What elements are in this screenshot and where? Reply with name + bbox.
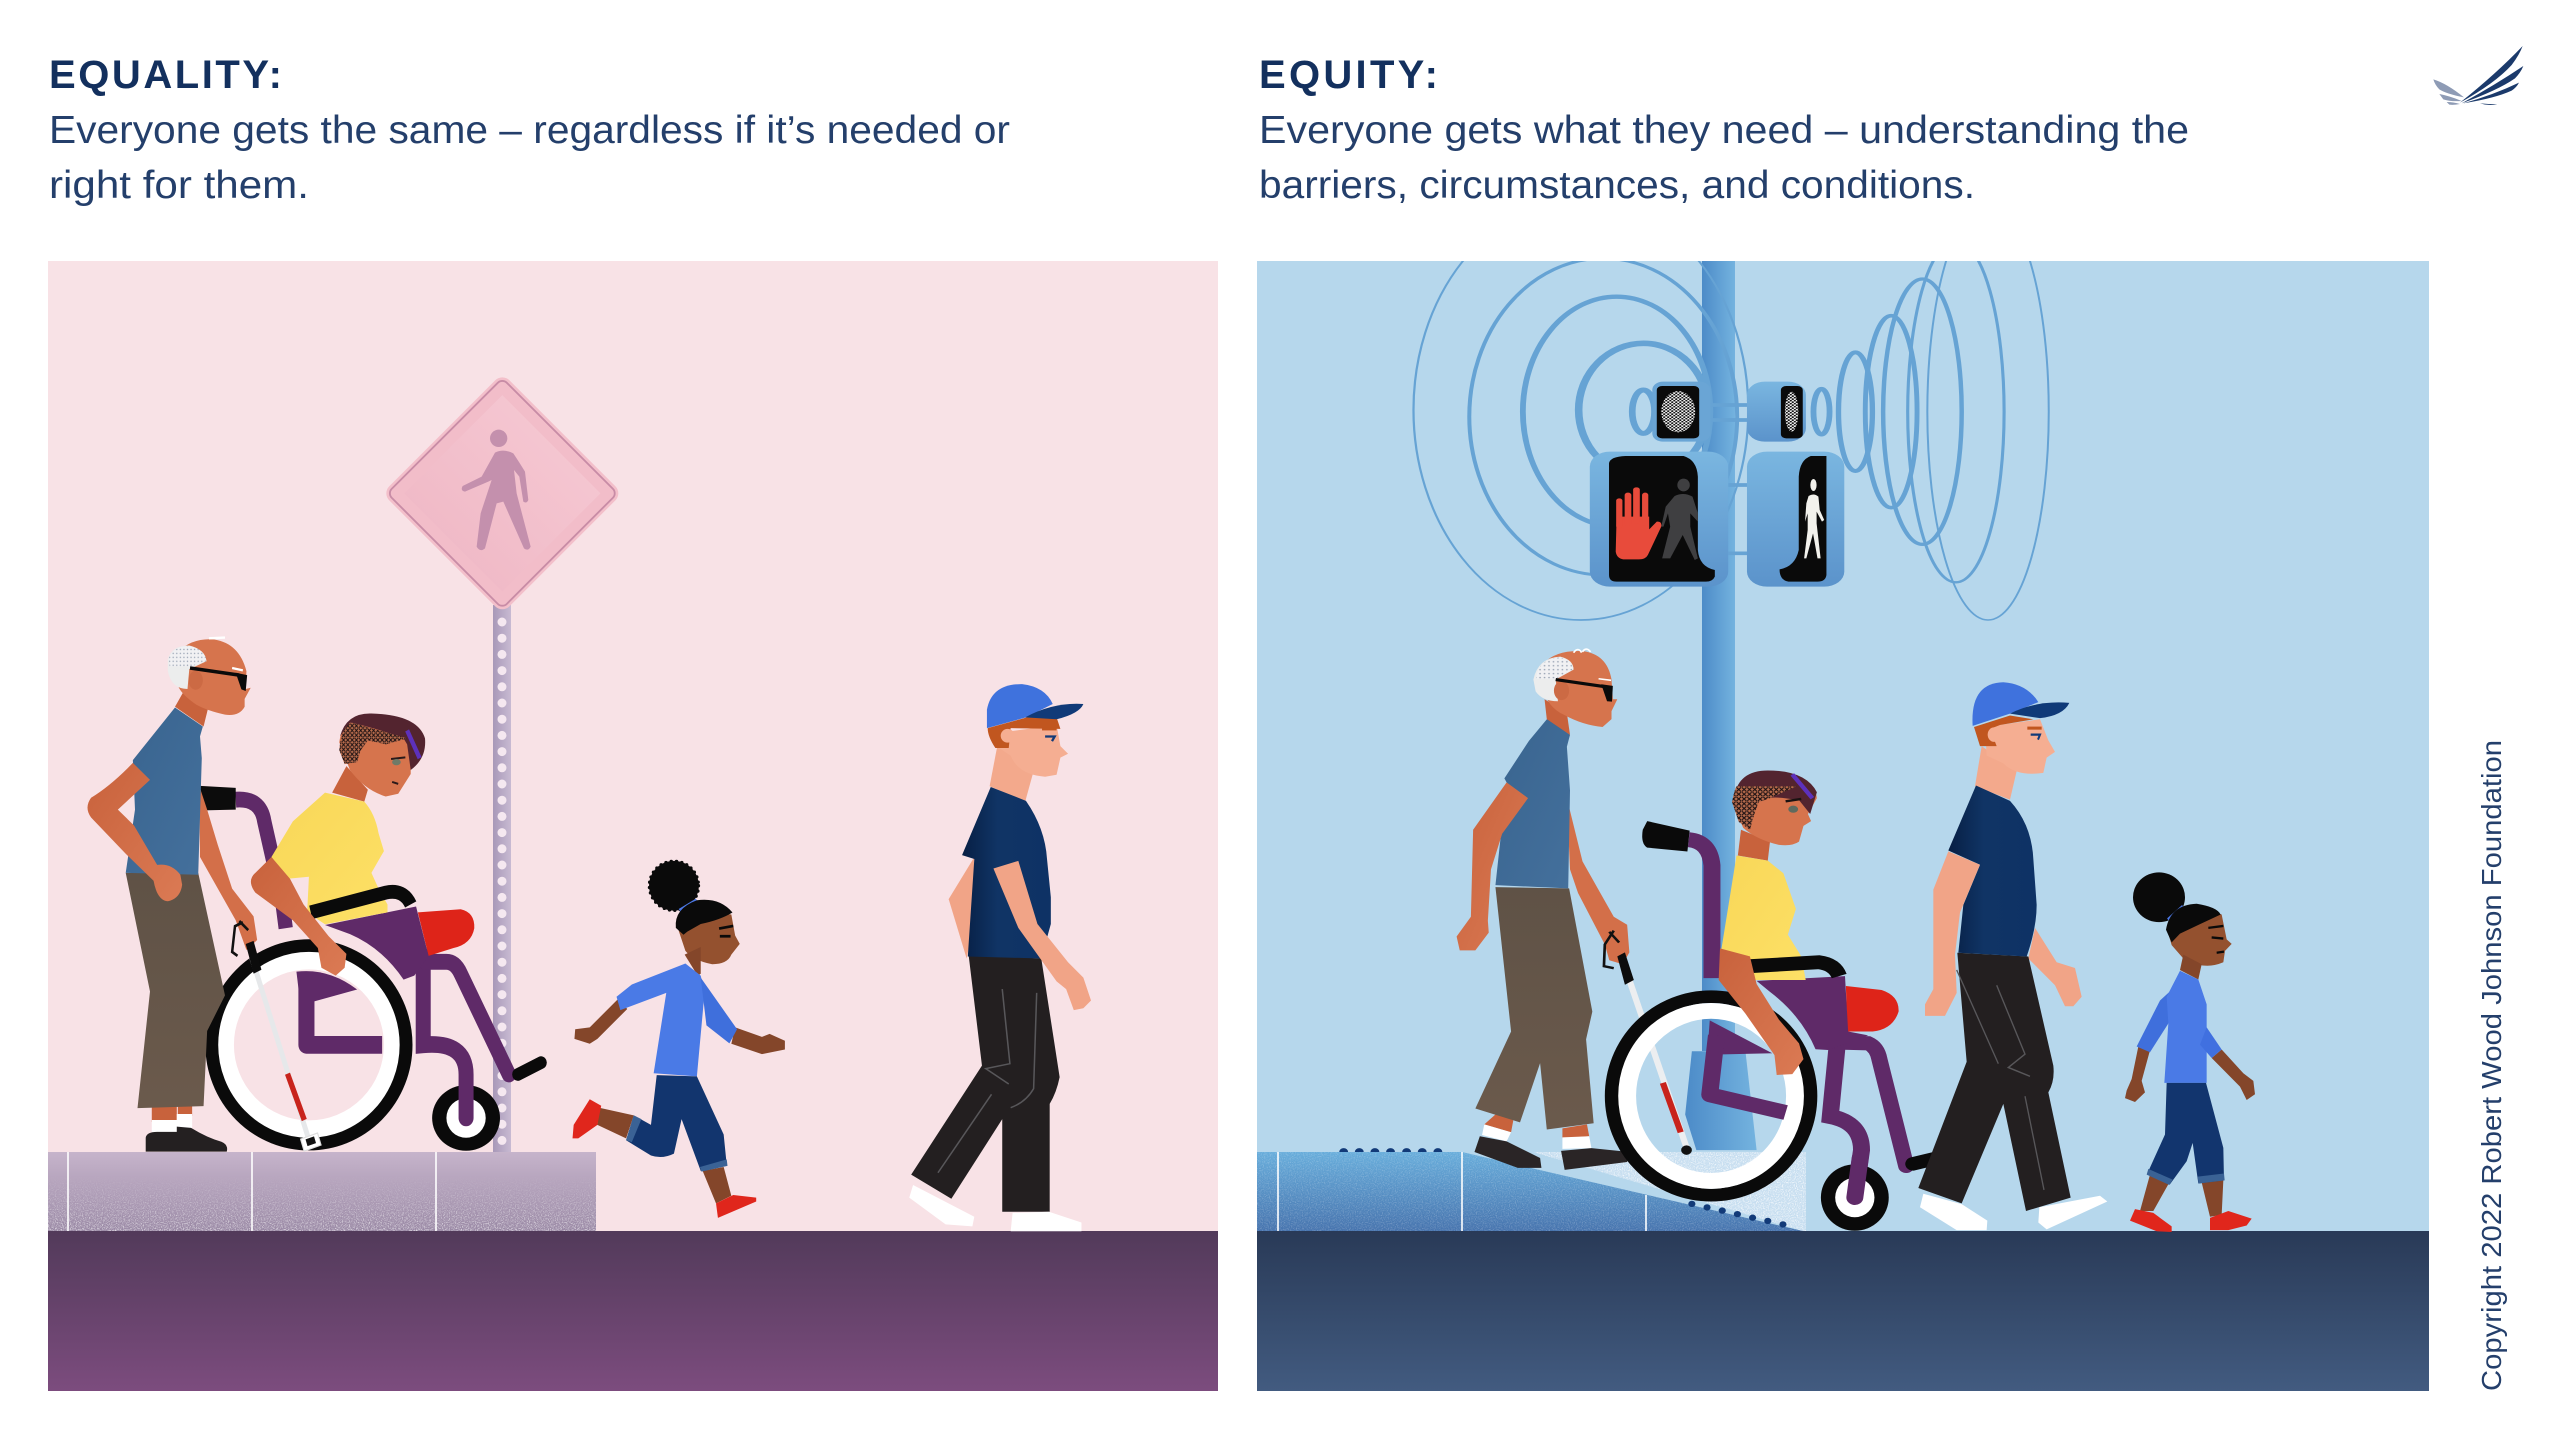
man: rear arm and fist: [87, 763, 182, 901]
description: equality: right for them.: [49, 164, 309, 207]
wheelchair user: [1719, 770, 1899, 1075]
panel: equity scene: [1257, 200, 2429, 1391]
signal connectors: [1713, 403, 1747, 556]
description: equality: [49, 109, 1010, 207]
description: equity: Everyone gets what they need – understanding the: [1259, 109, 2189, 152]
group: older man and wheelchair user: [87, 638, 541, 1152]
sign post: [493, 605, 511, 1155]
group: equity man, wheelchair user and tactile dots: [1339, 649, 1937, 1231]
icon: pedestrian silhouette: [462, 430, 531, 550]
man: shirt: [126, 708, 203, 875]
wheelchair user: head and hair: [339, 713, 425, 797]
footrest: [1913, 1158, 1937, 1164]
description: equality: Everyone gets the same – regardless if it’s needed or: [49, 109, 1010, 152]
group: child running and man walking: [573, 684, 1091, 1231]
title: equality: EQUALITY:: [49, 53, 282, 97]
wheelchair big wheel: [212, 947, 406, 1143]
wheelchair user: legs: [325, 906, 474, 980]
child running: [573, 861, 785, 1218]
sound waves: left: [1412, 261, 1748, 621]
armrest: [311, 892, 411, 912]
cane: [1604, 931, 1692, 1155]
copyright note: Copyright 2022 Robert Wood Johnson Foundation: [2476, 740, 2507, 1391]
pole base: [1685, 1051, 1757, 1150]
small wheel: [1821, 1158, 1889, 1231]
walk signal: stop hand: [1590, 452, 1728, 587]
wheelchair small wheel: [432, 1085, 500, 1151]
audio speaker: right: [1747, 382, 1806, 442]
man walking with cap: [1918, 682, 2107, 1230]
audio speaker: left: [1652, 382, 1710, 442]
road: navy: [1257, 1231, 2429, 1391]
man: front arm: [199, 786, 257, 950]
man walking with cap: [909, 684, 1091, 1231]
heading block: equality: [49, 53, 1010, 207]
wheelchair frame: [296, 956, 509, 1118]
curb: [48, 1152, 596, 1231]
child walking: [2125, 872, 2255, 1232]
sound waves and pedestrian signal: [1412, 261, 2050, 621]
group: equity man and child walking: [1918, 682, 2255, 1232]
panel: equality scene: [48, 261, 1218, 1391]
description: equity: [1259, 109, 2189, 207]
description: equity: barriers, circumstances, and conditions.: [1259, 164, 1975, 207]
wheelchair frame rear: [1642, 821, 1712, 978]
road: purple: [48, 1231, 1218, 1391]
man: neck and head: [168, 638, 251, 727]
icon: red hand: [1616, 487, 1661, 559]
big wheel: [1612, 997, 1810, 1195]
icon: white walking figure: [1804, 479, 1824, 558]
sound waves: right: [1810, 261, 2050, 621]
wheelchair push handle and back frame: [200, 786, 286, 928]
icon: dim walking figure: [1661, 479, 1698, 560]
wheelchair frame: [1708, 1020, 1906, 1198]
older man with cane: [1457, 649, 1692, 1170]
signal pole: [1702, 261, 1735, 1051]
curb ramp: [1257, 1152, 1803, 1231]
pedestrian crossing sign: [396, 387, 608, 599]
footrest: [518, 1063, 541, 1074]
walk signal: walking figure: [1747, 452, 1844, 587]
title: equity: EQUITY:: [1259, 53, 1438, 97]
hair bun: [649, 861, 698, 910]
wheelchair user: neck and shirt: [271, 766, 387, 924]
textured landing behind ramp: [1533, 1152, 1806, 1231]
heading block: equity: [1259, 53, 2189, 207]
panel background: blue: [1257, 261, 2429, 1391]
man: legs and shoes: [126, 873, 227, 1152]
panel background: pink: [48, 261, 1218, 1391]
tactile dots: [1339, 1148, 1787, 1228]
wheelchair user: arm: [251, 857, 346, 976]
icon: foundation wing logo: [2433, 46, 2523, 105]
cane: [232, 921, 321, 1151]
